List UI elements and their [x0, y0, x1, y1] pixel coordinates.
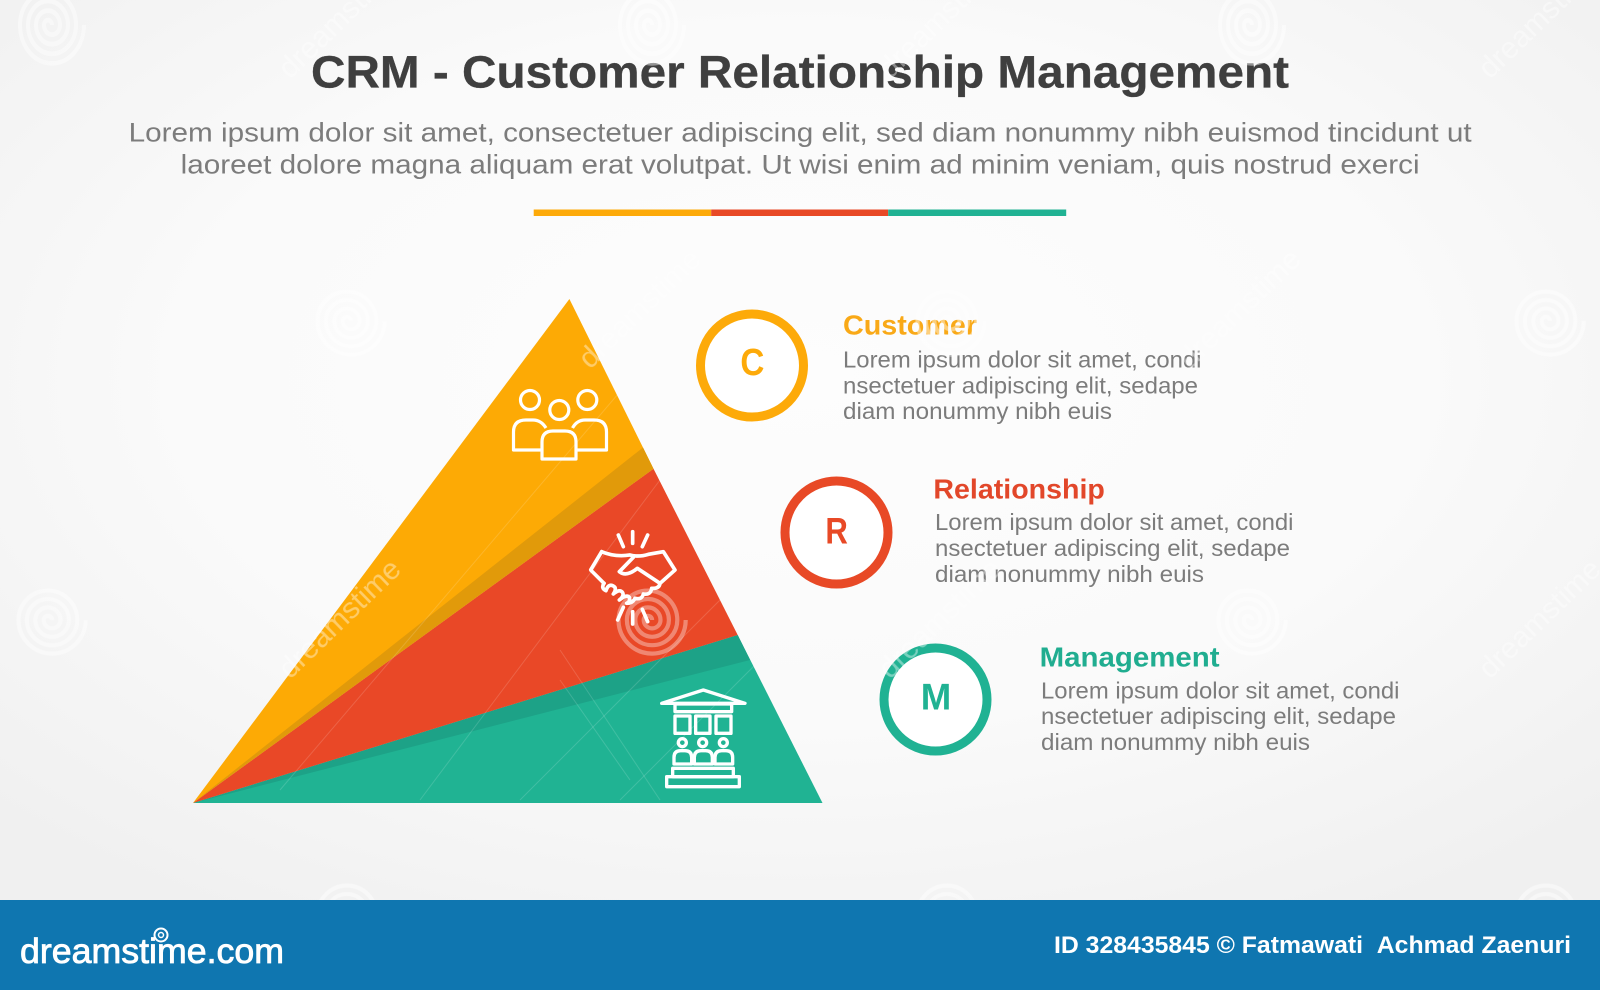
customer item: [700, 309, 1202, 424]
footer logo: dreamstime.com: [20, 932, 284, 971]
body text: customer: [843, 346, 1202, 424]
icon: institution building: [662, 690, 745, 787]
footer credit: ID 328435845 © Fatmawati Achmad Zaenuri: [1054, 932, 1571, 959]
pyramid segment: relationship (red): [193, 469, 738, 803]
body text: relationship: diam nonummy nibh euis: [935, 561, 1204, 587]
body text: customer: Lorem ipsum dolor sit amet, condi: [843, 346, 1202, 372]
tricolor divider bar: [534, 210, 1066, 216]
subtitle text: Lorem ipsum dolor sit amet, consectetuer adipiscing elit, sed diam nonummy nibh euismod tincidunt ut: [129, 118, 1472, 148]
watermark spirals and text: dreamstime: [572, 242, 708, 375]
teal shadow band: [193, 635, 750, 803]
body text: management: Lorem ipsum dolor sit amet, condi: [1041, 677, 1400, 703]
pyramid segment: management (teal): [193, 635, 822, 803]
circle badge C: C: [740, 342, 764, 384]
circle badge M: [884, 648, 987, 751]
heading: Customer: Customer: [843, 309, 977, 340]
watermark spirals and text: dreamstime: [872, 552, 1008, 685]
relationship item: [785, 473, 1294, 587]
body text: relationship: Lorem ipsum dolor sit amet, condi: [935, 509, 1294, 535]
body text: customer: diam nonummy nibh euis: [843, 398, 1112, 424]
orange shadow band: [193, 448, 654, 803]
subtitle text: [129, 118, 1472, 180]
icon: customers group: [514, 390, 606, 459]
icon: handshake: [591, 532, 675, 624]
heading: Relationship: Relationship: [933, 473, 1105, 504]
body text: management: diam nonummy nibh euis: [1041, 729, 1310, 755]
body text: management: nsectetuer adipiscing elit, sedape: [1041, 703, 1396, 729]
circle badge C: [700, 314, 804, 417]
circle badge R: [785, 481, 888, 584]
circle badge M: M: [921, 676, 951, 717]
pyramid segment: customer (orange): [193, 299, 654, 803]
body text: relationship: nsectetuer adipiscing elit, sedape: [935, 535, 1290, 561]
body text: management: [1041, 677, 1400, 755]
title: CRM - Customer Relationship Management: [311, 46, 1289, 98]
watermark spirals and text: dreamstime: [272, 552, 408, 685]
watermark spirals and text: dreamstime: [1172, 242, 1308, 375]
pyramid chart: [193, 299, 822, 803]
heading: Management: Management: [1040, 642, 1220, 673]
subtitle text: laoreet dolore magna aliquam erat volutpat. Ut wisi enim ad minim veniam, quis nostrud exerci: [181, 150, 1420, 180]
footer bar: [0, 900, 1600, 990]
management item: [884, 642, 1400, 755]
body text: customer: nsectetuer adipiscing elit, sedape: [843, 372, 1198, 398]
body text: relationship: [935, 509, 1294, 587]
circle badge R: R: [825, 510, 848, 551]
